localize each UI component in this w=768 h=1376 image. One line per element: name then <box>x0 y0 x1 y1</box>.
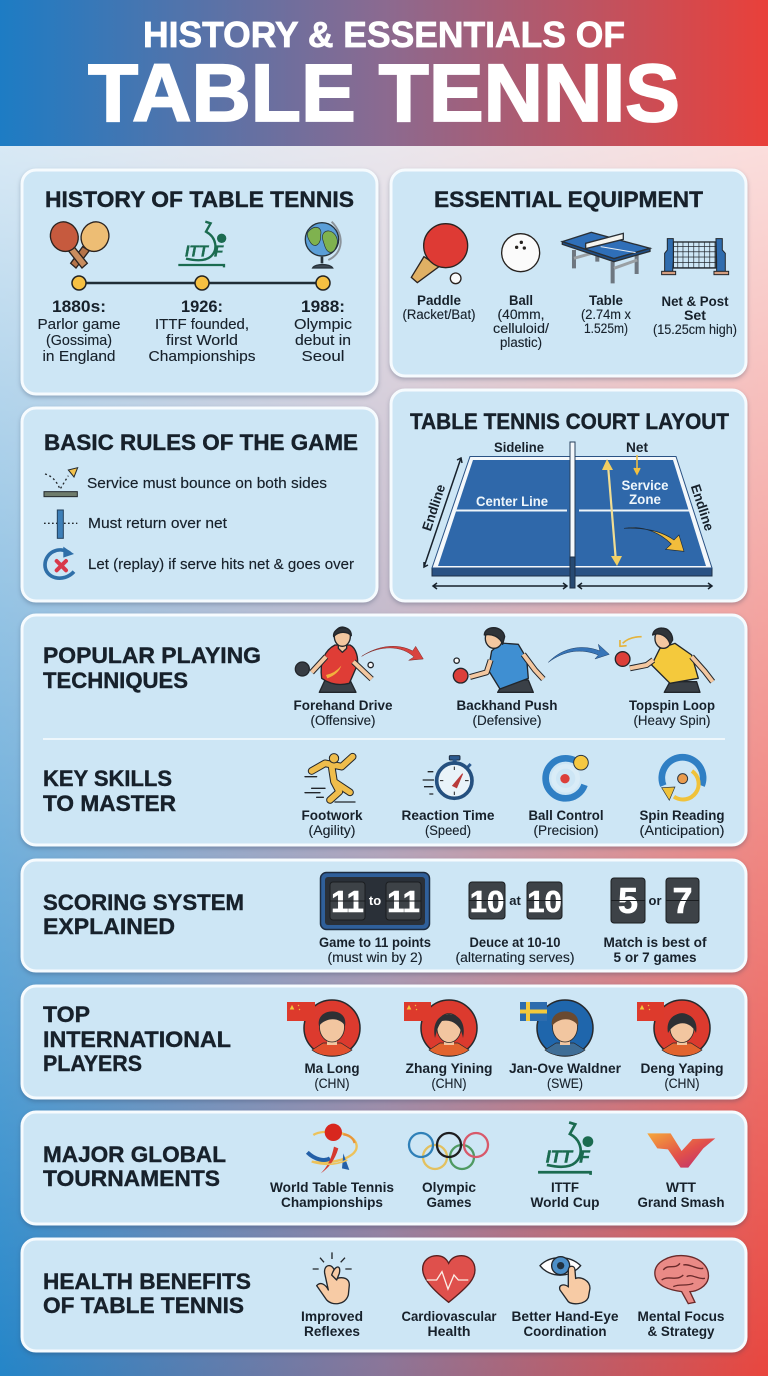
label: Ma Long: (CHN) <box>314 1076 350 1091</box>
label: Jan-Ove Waldner: (SWE) <box>547 1076 583 1091</box>
avatar: Zhang Yining <box>421 1000 477 1056</box>
label: ITTF world cup: World Cup <box>530 1195 600 1210</box>
icon: net return <box>44 510 77 538</box>
icon: forehand drive player <box>295 627 373 692</box>
icon: ITTF logo: ITT <box>546 1147 573 1167</box>
heading: players: PLAYERS <box>43 1051 142 1076</box>
rule text: service: Service must bounce on both sides <box>87 476 327 492</box>
panel: court layout <box>391 390 746 601</box>
arrows: bottom width <box>433 583 712 589</box>
label: ball <box>493 293 549 350</box>
milestone: 1880s: Parlor game <box>38 317 120 333</box>
milestone: 1880s: in England <box>42 349 116 365</box>
arrow: backhand <box>548 644 609 662</box>
scoreboard: 11 to 11: 11 <box>387 884 420 919</box>
milestone: 1880s <box>38 297 120 365</box>
heading: health: OF TABLE TENNIS <box>43 1293 244 1318</box>
icon: stopwatch <box>423 756 472 798</box>
milestone: 1926: Championships <box>148 349 256 365</box>
label: spin reading: Spin Reading <box>640 808 724 823</box>
milestone: 1880s: 1880s: <box>52 297 106 316</box>
panel: techniques and skills <box>22 615 746 845</box>
heading: players: TOP <box>43 1002 90 1027</box>
label: backhand: Backhand Push <box>456 698 558 713</box>
label: mental focus: Mental Focus <box>638 1309 724 1324</box>
icon: bounce <box>44 468 78 497</box>
label: world championships: Championships <box>281 1195 383 1210</box>
icon: ITTF logo <box>178 222 226 267</box>
heading: scoring: SCORING SYSTEM <box>43 890 244 915</box>
heading: techniques <box>43 643 261 693</box>
label: ITTF world cup: ITTF <box>551 1180 579 1195</box>
label: Ma Long: Ma Long <box>304 1061 360 1076</box>
scoreboard: 10 at 10 <box>469 882 562 919</box>
milestone: 1988: 1988: <box>301 297 345 316</box>
icon: ITTF logo: F <box>214 244 224 261</box>
label: reflexes: Improved <box>301 1309 363 1324</box>
label: game to 11 <box>319 935 431 965</box>
label: game to 11: (must win by 2) <box>328 950 422 965</box>
label: ball control: Ball Control <box>528 808 604 823</box>
heading: rules: BASIC RULES OF THE GAME <box>44 430 358 455</box>
label: reflexes <box>301 1309 363 1339</box>
icon: net and posts <box>662 239 729 275</box>
arrow: left endline <box>424 458 462 567</box>
icon: ITTF logo: ITT <box>185 244 210 261</box>
label: backhand <box>456 698 558 728</box>
label: reaction time <box>402 808 495 838</box>
icon: paddle and ball <box>411 224 468 284</box>
label: mental focus: & Strategy <box>648 1324 715 1339</box>
label: game to 11: Game to 11 points <box>319 935 431 950</box>
scoreboard: 10 at 10: at <box>509 893 521 908</box>
label: net and post: (15.25cm high) <box>653 322 737 337</box>
label: deuce: Deuce at 10-10 <box>470 935 560 950</box>
milestone: 1988: Olympic <box>294 317 352 333</box>
panel: basic rules <box>22 408 377 601</box>
arrow: curved ball path <box>624 528 684 551</box>
heading: scoring <box>43 890 244 939</box>
flag: China <box>404 1002 431 1021</box>
icon: let replay <box>45 547 74 578</box>
label: backhand: (Defensive) <box>472 713 542 728</box>
label: deuce <box>456 935 574 965</box>
heading: key skills: KEY SKILLS <box>43 766 172 791</box>
heading: players <box>43 1002 231 1076</box>
icon: olympic rings <box>409 1133 488 1169</box>
avatar: Jan-Ove Waldner <box>537 1000 593 1056</box>
milestone: 1988: debut in <box>295 333 351 349</box>
label: table: (2.74m x <box>581 307 631 322</box>
panel: essential equipment <box>391 170 746 376</box>
scoreboard: 10 at 10: 10 <box>470 884 504 919</box>
label: olympic games <box>422 1180 476 1210</box>
label: WTT grand smash: Grand Smash <box>638 1195 724 1210</box>
label: footwork: Footwork <box>302 808 363 823</box>
heading: history: HISTORY OF TABLE TENNIS <box>45 187 354 212</box>
icon: ITTF logo <box>538 1122 593 1175</box>
label: table <box>581 293 631 336</box>
label: Deng Yaping <box>640 1061 724 1091</box>
rule text: return: Must return over net <box>88 516 227 532</box>
scoreboard: 5 or 7: 7 <box>672 880 693 921</box>
label: forehand <box>294 698 393 728</box>
label: footwork: (Agility) <box>308 823 356 838</box>
flag: Sweden <box>520 1002 547 1021</box>
icon: ball <box>502 234 540 272</box>
label: reflexes: Reflexes <box>304 1324 360 1339</box>
label: Ma Long <box>304 1061 360 1091</box>
label: ball: celluloid/ <box>493 321 549 336</box>
label: paddle: Paddle <box>417 293 461 308</box>
scoreboard: 5 or 7: 5 <box>618 880 638 921</box>
label: topspin: (Heavy Spin) <box>634 713 710 728</box>
flag: China <box>637 1002 664 1021</box>
milestone: 1926: 1926: <box>181 297 223 316</box>
label: service zone: Zone <box>629 492 661 507</box>
label: ITTF world cup <box>530 1180 600 1210</box>
scoreboard: 11 to 11: 11 <box>331 884 364 919</box>
icon: eye and hand <box>540 1257 590 1304</box>
heading: key skills: TO MASTER <box>43 791 176 816</box>
icon: crossed paddles <box>46 217 114 268</box>
heading: players: INTERNATIONAL <box>43 1027 231 1052</box>
label: Zhang Yining <box>406 1061 492 1091</box>
label: sideline: Sideline <box>494 440 544 455</box>
milestone: 1926: ITTF founded, <box>155 317 249 333</box>
icon: table <box>562 232 650 283</box>
label: paddle <box>402 293 476 322</box>
panel: scoring system <box>22 860 746 971</box>
label: net: Net <box>626 440 648 455</box>
title line one: HISTORY & ESSENTIALS OF <box>143 14 625 55</box>
icon: globe <box>305 222 341 268</box>
label: ball: Ball <box>509 293 533 308</box>
label: cardiovascular: Health <box>428 1324 470 1339</box>
panel: major tournaments <box>22 1112 746 1224</box>
heading: equipment: ESSENTIAL EQUIPMENT <box>434 187 704 212</box>
label: reaction time: (Speed) <box>425 823 471 838</box>
label: world championships: World Table Tennis <box>270 1180 394 1195</box>
scoreboard: 5 or 7: or <box>648 893 662 908</box>
label: hand-eye <box>512 1309 619 1339</box>
heading: techniques: TECHNIQUES <box>43 668 188 693</box>
icon: heart <box>423 1256 475 1302</box>
label: spin reading: (Anticipation) <box>640 823 724 838</box>
label: world championships <box>270 1180 394 1210</box>
label: topspin: Topspin Loop <box>629 698 715 713</box>
label: Zhang Yining: (CHN) <box>432 1076 466 1091</box>
arrow: yellow double arrow <box>602 459 622 566</box>
label: spin reading <box>640 808 724 838</box>
icon: topspin loop player <box>615 628 713 692</box>
label: service zone <box>622 478 669 507</box>
label: Deng Yaping: Deng Yaping <box>640 1061 724 1076</box>
heading: court: TABLE TENNIS COURT LAYOUT <box>410 409 730 434</box>
rule text: let: Let (replay) if serve hits net & goes over <box>88 557 354 573</box>
label: Deng Yaping: (CHN) <box>664 1076 700 1091</box>
heading: tournaments: MAJOR GLOBAL <box>43 1142 226 1167</box>
scoreboard: 11 to 11: to <box>369 893 381 908</box>
scoreboard: 5 or 7 <box>611 878 699 923</box>
label: hand-eye: Better Hand-Eye <box>512 1309 619 1324</box>
label: ball: plastic) <box>500 335 542 350</box>
label: table: 1.525m) <box>584 321 628 336</box>
label: ball control: (Precision) <box>534 823 598 838</box>
court diagram <box>424 442 712 589</box>
timeline <box>72 276 330 290</box>
label: forehand: Forehand Drive <box>294 698 393 713</box>
milestone: 1988 <box>294 297 352 365</box>
heading: techniques: POPULAR PLAYING <box>43 643 261 668</box>
scoreboard: 10 at 10: 10 <box>527 884 562 919</box>
icon: ball control <box>546 755 588 798</box>
label: ball control <box>528 808 604 838</box>
icon: WTT logo <box>647 1133 715 1168</box>
heading: health <box>43 1269 251 1318</box>
label: olympic games: Games <box>426 1195 472 1210</box>
arrow: forehand <box>362 646 423 660</box>
title banner <box>0 0 768 146</box>
scoreboard: 11 to 11 <box>320 872 430 930</box>
label: cardiovascular: Cardiovascular <box>402 1309 497 1324</box>
label: footwork <box>302 808 363 838</box>
heading: key skills <box>43 766 176 816</box>
label: Jan-Ove Waldner <box>509 1061 622 1091</box>
label: table: Table <box>589 293 623 308</box>
label: reaction time: Reaction Time <box>402 808 495 823</box>
title line two: TABLE TENNIS <box>88 48 680 139</box>
heading: tournaments <box>43 1142 226 1191</box>
arrow: net pointer <box>634 455 640 474</box>
label: Jan-Ove Waldner: Jan-Ove Waldner <box>509 1061 622 1076</box>
panel: health benefits <box>22 1239 746 1351</box>
panel: history of table tennis <box>22 170 377 394</box>
icon: brain <box>655 1256 708 1304</box>
label: net and post: Net & Post <box>662 294 729 309</box>
icon: backhand push player <box>453 628 543 692</box>
avatar: Deng Yaping <box>654 1000 710 1056</box>
avatar: Ma Long <box>304 1000 360 1056</box>
label: WTT grand smash <box>638 1180 724 1210</box>
label: paddle: (Racket/Bat) <box>402 307 476 322</box>
flag: China <box>287 1002 315 1021</box>
label: WTT grand smash: WTT <box>666 1180 697 1195</box>
label: mental focus <box>638 1309 724 1339</box>
label: right endline: Endline <box>688 482 717 533</box>
label: ball: (40mm, <box>498 307 544 322</box>
label: olympic games: Olympic <box>422 1180 476 1195</box>
label: service zone: Service <box>622 478 669 493</box>
label: net and post <box>653 294 737 337</box>
label: cardiovascular <box>402 1309 497 1339</box>
label: net and post: Set <box>684 308 707 323</box>
label: topspin <box>629 698 715 728</box>
label: hand-eye: Coordination <box>524 1324 606 1339</box>
heading: health: HEALTH BENEFITS <box>43 1269 251 1294</box>
heading: scoring: EXPLAINED <box>43 914 175 939</box>
icon: reflex hand <box>313 1252 352 1304</box>
label: forehand: (Offensive) <box>310 713 376 728</box>
label: match <box>604 935 707 965</box>
label: match: 5 or 7 games <box>614 950 696 965</box>
milestone: 1926 <box>148 297 256 365</box>
icon: ITTF logo: F <box>579 1147 591 1167</box>
label: center line: Center Line <box>476 494 548 509</box>
label: left endline: Endline <box>419 482 448 533</box>
milestone: 1988: Seoul <box>302 349 344 365</box>
icon: world championships logo <box>307 1124 357 1173</box>
icon: footwork <box>305 754 355 802</box>
milestone: 1926: first World <box>166 333 238 349</box>
icon: spin reading <box>662 757 703 800</box>
label: Zhang Yining: Zhang Yining <box>406 1061 492 1076</box>
panel: top players <box>22 986 746 1098</box>
milestone: 1880s: (Gossima) <box>46 333 112 349</box>
label: deuce: (alternating serves) <box>456 950 574 965</box>
heading: tournaments: TOURNAMENTS <box>43 1166 220 1191</box>
label: match: Match is best of <box>604 935 707 950</box>
